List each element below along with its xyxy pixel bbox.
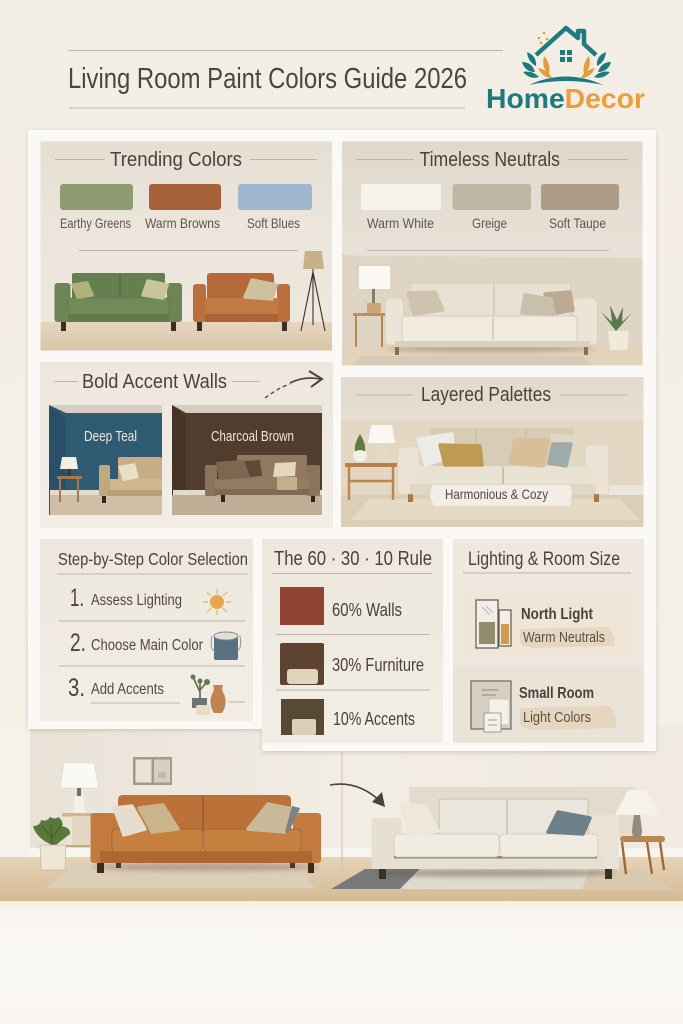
panel: The 60-30-10 Rule [262, 539, 443, 743]
pillows [418, 434, 453, 465]
panel: Trending Colors [40, 142, 332, 350]
swatch: Soft Taupe [541, 184, 619, 231]
panel: Lighting & Room Size [453, 539, 644, 743]
lamp and table [57, 457, 82, 502]
wall [30, 725, 683, 857]
rug [350, 499, 640, 520]
swatch: Greige [452, 184, 531, 231]
row: 10% Accents [281, 699, 415, 735]
sofa [99, 457, 162, 503]
step 3: Add Accents [68, 674, 245, 715]
row: 30% Furniture [280, 643, 424, 685]
rug: right [331, 869, 673, 890]
card: North Light: North Light [521, 606, 593, 623]
swatch: Warm Browns [145, 184, 221, 231]
swatch: Warm Browns: Warm Browns [145, 215, 220, 231]
swatch: Soft Blues: Soft Blues [247, 215, 300, 231]
heading: Layered Palettes: Layered Palettes [421, 383, 551, 406]
step 2: Choose Main Color [70, 629, 241, 660]
icon: sun [203, 589, 231, 615]
room: Deep Teal [49, 405, 162, 515]
swatch: Earthy Greens: Earthy Greens [60, 215, 131, 231]
panel: Bold Accent Walls [40, 362, 333, 528]
icon: paint can [211, 632, 241, 660]
brush stroke: Warm Neutrals: Warm Neutrals [523, 629, 605, 646]
logo: HomeDecor: HomeDecor [486, 83, 645, 114]
arrow: dashed to solid [265, 371, 322, 398]
lamp and table [353, 266, 390, 347]
sofa: terracotta [90, 795, 321, 873]
floor [40, 322, 332, 350]
step 1: Assess Lighting: Assess Lighting [91, 592, 182, 609]
swatch: Warm White [361, 184, 441, 231]
callout: Harmonious & Cozy [430, 485, 572, 506]
step 3: Add Accents: 3. [68, 674, 85, 702]
swatch: Greige: Greige [472, 215, 507, 231]
heading: Lighting & Room Size [468, 549, 620, 570]
rug: left [47, 865, 314, 888]
sofa: cream [385, 283, 598, 355]
heading: Step-by-Step Color Selection [58, 549, 248, 569]
pillows [545, 292, 573, 314]
floor lamp [301, 251, 325, 331]
row: 10% Accents: 10% Accents [333, 709, 415, 729]
heading: Timeless Neutrals: Timeless Neutrals [420, 148, 560, 171]
room: Deep Teal: Deep Teal [84, 428, 137, 445]
card: Small Room [453, 666, 644, 743]
step 1: Assess Lighting: 1. [70, 584, 84, 612]
room backdrop [342, 254, 642, 345]
bottom room scene [0, 725, 683, 910]
pillows [73, 283, 92, 297]
plant: left [33, 817, 70, 870]
framed art [133, 757, 172, 785]
side table and lamp: right [409, 787, 665, 874]
step 1: Assess Lighting [70, 584, 231, 615]
icon: stacked frames [471, 681, 511, 732]
card: North Light [467, 591, 629, 655]
panel: Layered Palettes [341, 377, 644, 527]
room: Charcoal Brown [172, 405, 322, 515]
side table and lamp: left [60, 763, 99, 848]
icon: house with leaves [522, 28, 611, 85]
sofa [205, 455, 320, 502]
step 2: Choose Main Color: Choose Main Color [91, 637, 203, 654]
step 3: Add Accents: Add Accents [91, 681, 164, 698]
heading: The 60 · 30 · 10 Rule [274, 547, 432, 570]
side table, plant and lamp [345, 425, 397, 500]
icon: swatch frames [476, 600, 511, 648]
sofa: green [54, 273, 182, 331]
row: 30% Furniture: 30% Furniture [332, 655, 424, 675]
plant [601, 305, 632, 350]
heading: Bold Accent Walls: Bold Accent Walls [82, 370, 227, 393]
arrow: curved, between sofas [330, 784, 385, 807]
armchair: brown [193, 273, 290, 331]
row: 60% Walls: 60% Walls [332, 600, 402, 620]
sofa: cream with blue pillow [372, 799, 619, 879]
room: Charcoal Brown: Charcoal Brown [211, 428, 294, 445]
panel: Timeless Neutrals [342, 142, 642, 366]
swatch: Earthy Greens [60, 184, 133, 231]
swatch: Warm White: Warm White [367, 215, 434, 231]
white main panel [28, 130, 656, 751]
panel: Step-by-Step Color Selection [40, 539, 253, 721]
row: 60% Walls [280, 587, 402, 625]
floor [0, 857, 683, 901]
pillow [245, 280, 276, 299]
brush stroke: Light Colors [520, 706, 616, 730]
brush stroke: Light Colors: Light Colors [523, 709, 591, 726]
bottom white area [0, 901, 683, 1024]
pillows [114, 806, 145, 835]
pillows [400, 804, 438, 835]
heading: Trending Colors: Trending Colors [110, 148, 242, 171]
step 2: Choose Main Color: 2. [70, 629, 86, 657]
callout: Harmonious & Cozy: Harmonious & Cozy [445, 487, 548, 502]
sofa [398, 428, 609, 502]
swatch: Soft Blues [238, 184, 312, 231]
title block: Living Room Paint Colors Guide 2026 [68, 63, 467, 95]
swatch: Soft Taupe: Soft Taupe [549, 215, 606, 231]
icon: plant and vase [190, 674, 226, 715]
card: Small Room: Small Room [519, 685, 594, 702]
logo: HomeDecor [486, 28, 645, 114]
